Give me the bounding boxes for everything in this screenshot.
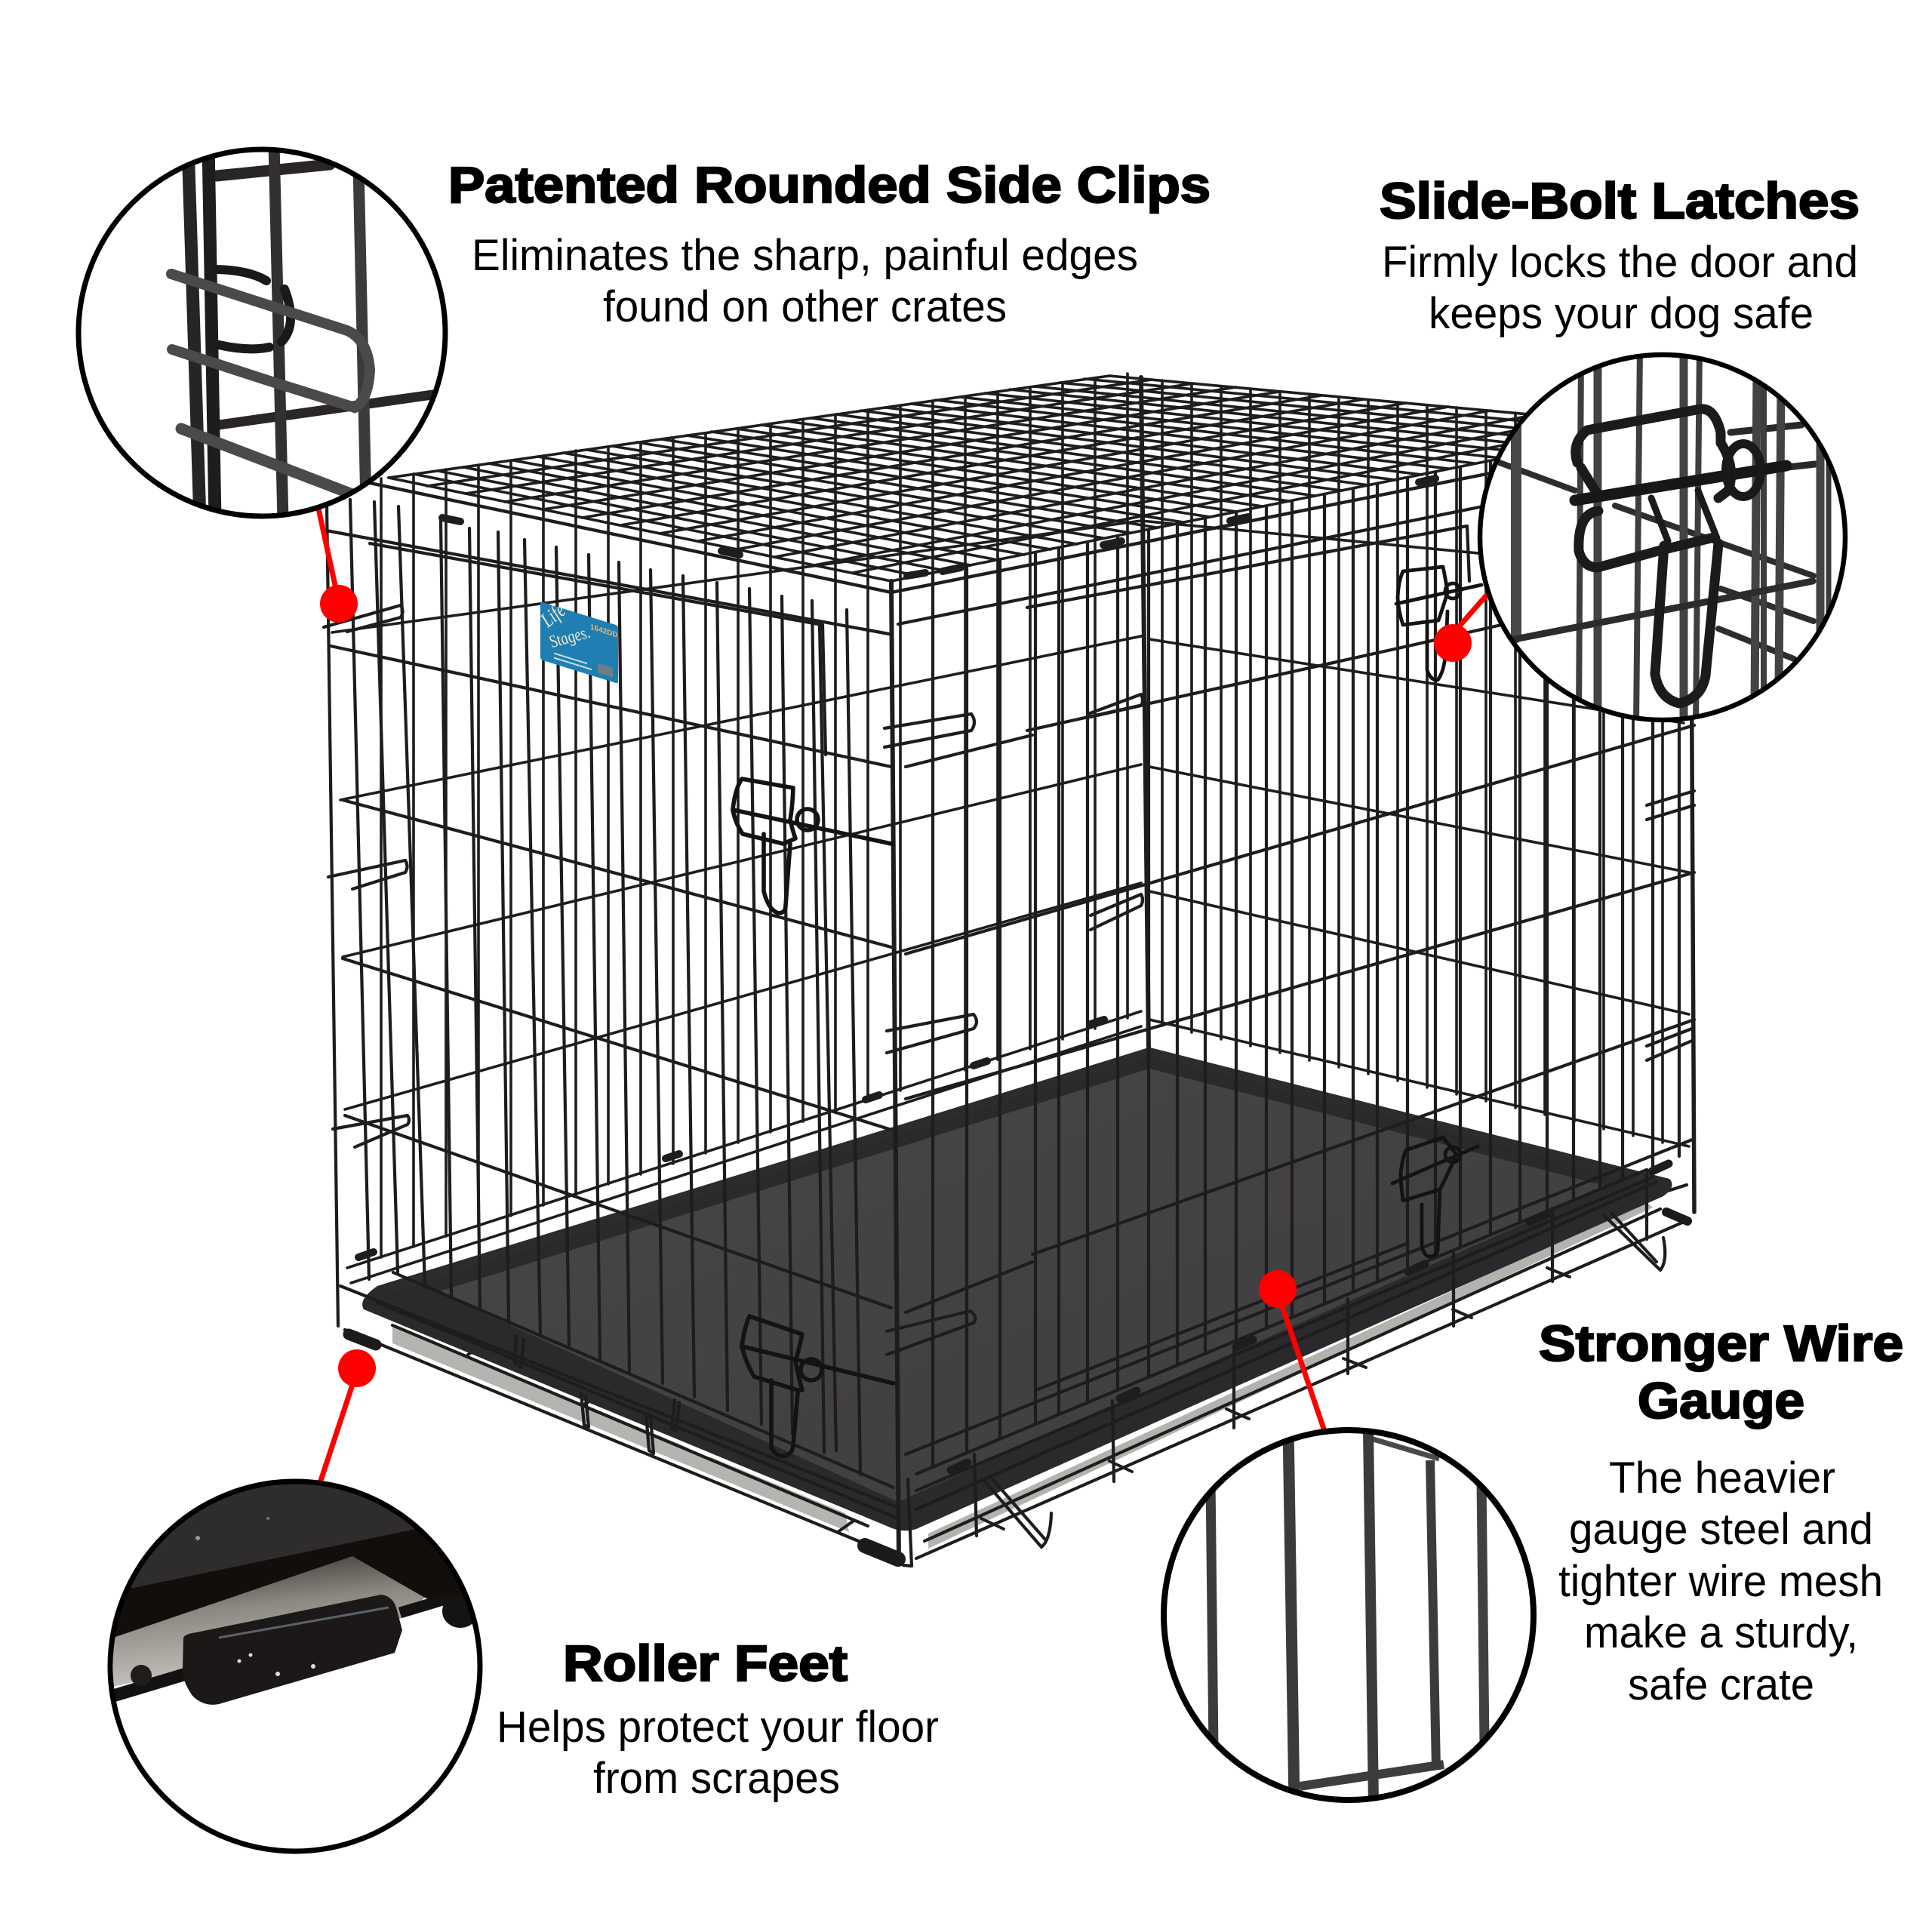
callout text: stronger wire gauge: tighter wire mesh bbox=[1558, 1557, 1883, 1606]
callout text: slide-bolt latches: keeps your dog safe bbox=[1429, 289, 1814, 338]
folding handle: rear bbox=[1604, 1214, 1665, 1270]
base hooks and clips bbox=[515, 1164, 1669, 1566]
detail circle: slide-bolt latch bbox=[1480, 347, 1845, 724]
callout text: roller feet: Helps protect your floor bbox=[497, 1703, 939, 1752]
roller foot: centre bbox=[865, 1546, 898, 1559]
product label card: Stages. bbox=[546, 623, 593, 651]
callout text: stronger wire gauge: The heavier bbox=[1609, 1454, 1835, 1503]
roller foot: right bbox=[1666, 1212, 1687, 1221]
latch: front lower bbox=[742, 1316, 894, 1457]
wire dog crate bbox=[324, 374, 1694, 1566]
callout text: roller feet bbox=[497, 1635, 939, 1803]
plastic tray bbox=[362, 1048, 1672, 1531]
leader line and dot: slide-bolt latches bbox=[1434, 593, 1488, 662]
folding handle: front bbox=[985, 1479, 1051, 1547]
hinge tubes bbox=[358, 1020, 1104, 1257]
callout text: patented rounded side clips bbox=[448, 157, 1211, 331]
product label card bbox=[536, 593, 618, 684]
leader line and dot: side clips bbox=[318, 509, 358, 623]
callout text: patented rounded side clips: Patented Rounded Side Clips bbox=[448, 157, 1211, 214]
back panels of the crate seen through the front bbox=[332, 374, 1689, 1283]
callout text: slide-bolt latches: Slide-Bolt Latches bbox=[1380, 173, 1860, 229]
product label card: 1642DD bbox=[590, 623, 618, 640]
product label card: Life bbox=[536, 599, 570, 632]
wire roof mesh bbox=[370, 376, 1660, 592]
callout text: stronger wire gauge: gauge steel and bbox=[1569, 1505, 1873, 1554]
callout text: stronger wire gauge bbox=[1539, 1315, 1903, 1709]
latch: front upper bbox=[733, 779, 891, 913]
callout text: stronger wire gauge: Gauge bbox=[1638, 1373, 1804, 1429]
detail circle: rounded side clips bbox=[78, 143, 445, 521]
front-left door panel wires bbox=[326, 500, 899, 1562]
latch: right upper bbox=[1396, 567, 1481, 680]
callout text: roller feet: from scrapes bbox=[593, 1754, 840, 1803]
front-right door panel wires bbox=[898, 423, 1694, 1509]
callout text: slide-bolt latches bbox=[1380, 173, 1860, 338]
leader line and dot: roller feet bbox=[316, 1349, 376, 1494]
detail circle: roller foot bbox=[107, 1479, 483, 1854]
callout text: stronger wire gauge: Stronger Wire bbox=[1539, 1315, 1903, 1372]
callout text: patented rounded side clips: found on other crates bbox=[603, 282, 1007, 331]
folding side loops bbox=[324, 605, 1694, 1355]
callout text: roller feet: Roller Feet bbox=[563, 1635, 848, 1692]
leader line and dot: wire gauge bbox=[1259, 1270, 1327, 1438]
callout text: stronger wire gauge: make a sturdy, bbox=[1584, 1608, 1858, 1657]
callout text: patented rounded side clips: Eliminates the sharp, painful edges bbox=[472, 231, 1138, 280]
detail circle: stronger wire gauge bbox=[1164, 1426, 1534, 1804]
base frame and slide-out pan supports bbox=[345, 1185, 1689, 1559]
latch: right lower bbox=[1392, 1137, 1478, 1257]
roof edge clips bbox=[442, 478, 1435, 576]
callout text: slide-bolt latches: Firmly locks the door and bbox=[1382, 238, 1858, 287]
callout text: stronger wire gauge: safe crate bbox=[1628, 1660, 1814, 1709]
roller foot: left bbox=[349, 1334, 376, 1345]
